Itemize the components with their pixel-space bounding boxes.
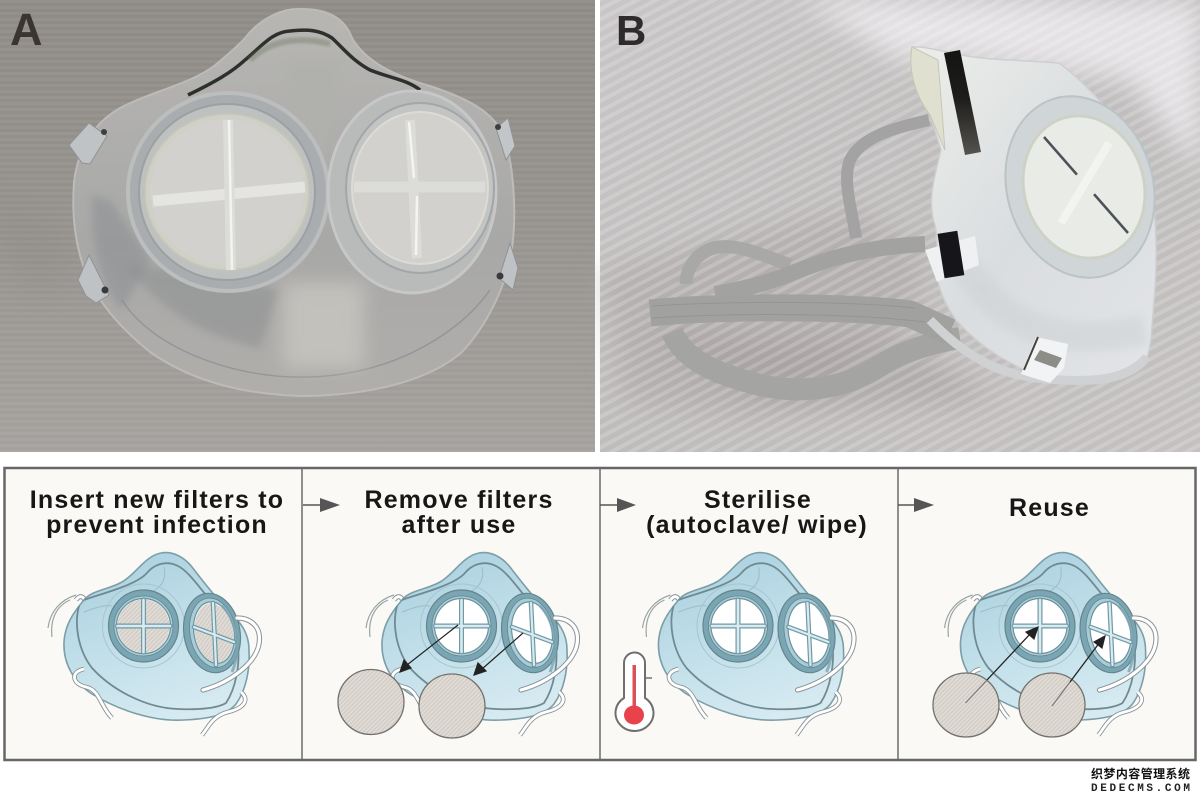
filter — [984, 78, 1176, 296]
icon: thermometer — [616, 652, 654, 731]
removed filter discs — [338, 670, 485, 738]
step 2: remove filters — [338, 486, 577, 738]
watermark: 织梦内容管理系统 — [1091, 766, 1190, 781]
clean mask — [944, 553, 1156, 735]
heading: step 3: Sterilise — [704, 486, 812, 514]
straps — [650, 120, 960, 389]
watermark: DEDECMS.COM — [1091, 783, 1190, 795]
label B: B — [616, 7, 646, 54]
empty mask — [366, 553, 577, 735]
arrow: step 3 to step 4 — [898, 498, 934, 512]
panel B: photo of mask from the side with straps — [600, 0, 1200, 452]
heading: step 4: Reuse — [1009, 494, 1090, 522]
strap clips — [925, 231, 1068, 383]
nose wire — [188, 30, 420, 95]
heading: step 1: Insert new filters to — [30, 486, 284, 514]
arrows: filters out — [400, 625, 523, 675]
nose strip — [944, 50, 981, 155]
mask body: side view shell — [911, 47, 1176, 383]
step 1: insert new filters — [30, 486, 284, 735]
mask body: translucent shell — [69, 9, 518, 396]
heading: step 3: (autoclave/ wipe) — [646, 511, 868, 539]
arrow: step 2 to step 3 — [600, 498, 636, 512]
clean mask — [642, 553, 854, 735]
mask with filters fitted — [48, 553, 259, 735]
watermark — [1091, 766, 1190, 795]
ear clips — [69, 118, 518, 303]
arrows: filters in — [966, 627, 1105, 706]
step 3: sterilise — [616, 486, 868, 735]
left filter — [128, 93, 328, 291]
heading: step 1: prevent infection — [46, 511, 268, 539]
panel A: photo of mask from the front — [0, 0, 595, 452]
label A: A — [10, 4, 42, 55]
filter discs going back in — [933, 673, 1085, 737]
step 4: reuse — [933, 494, 1156, 737]
arrow: step 1 to step 2 — [303, 498, 340, 512]
heading: step 2: after use — [401, 511, 517, 539]
heading: step 2: Remove filters — [364, 486, 554, 514]
panel: filter reuse cycle strip — [4, 468, 1196, 760]
right filter — [328, 91, 496, 293]
